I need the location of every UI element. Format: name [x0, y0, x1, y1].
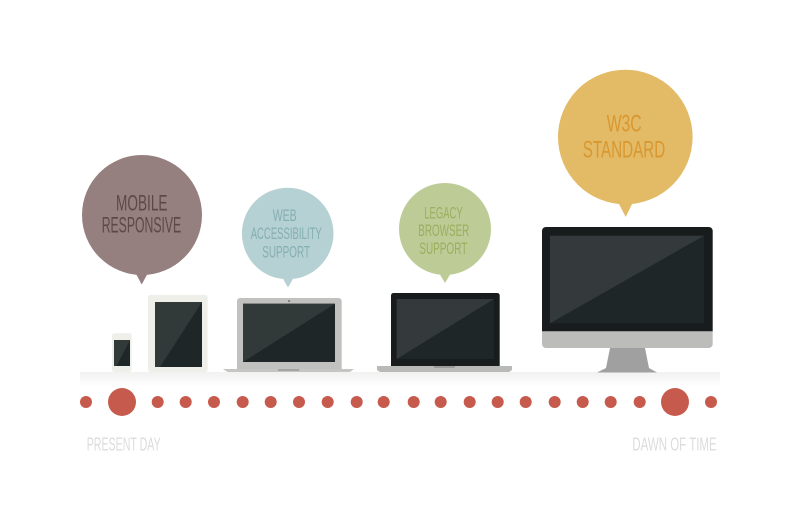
- bubble label: legacy browser support: LEGACY: [424, 204, 463, 222]
- device: desktop monitor: [542, 227, 713, 372]
- marker: present day: [108, 388, 136, 416]
- bubble label: web accessibility support: ACCESSIBILITY: [251, 225, 322, 243]
- bubble label: legacy browser support: SUPPORT: [419, 240, 467, 258]
- timeline label: dawn of time: DAWN OF TIME: [632, 435, 717, 455]
- bubble label: W3C standard: [583, 111, 665, 163]
- bubble label: mobile responsive: MOBILE: [116, 191, 168, 216]
- bubble label: legacy browser support: [418, 204, 469, 258]
- device: dark laptop: [377, 293, 512, 372]
- bubble label: mobile responsive: [102, 191, 181, 237]
- speech bubble: W3C standard: [558, 70, 693, 217]
- speech bubble: legacy browser support: [399, 183, 491, 283]
- device: silver laptop: [223, 298, 354, 372]
- bubble label: web accessibility support: WEB: [273, 207, 297, 225]
- bubble label: mobile responsive: RESPONSIVE: [102, 212, 181, 237]
- bubble label: web accessibility support: [251, 207, 322, 261]
- speech bubble: mobile responsive: [82, 155, 202, 284]
- timeline label: present day: PRESENT DAY: [87, 435, 161, 455]
- device: tablet: [148, 295, 208, 372]
- speech bubble: web accessibility support: [242, 188, 334, 288]
- shelf: [80, 372, 720, 387]
- bubble label: W3C standard: W3C: [607, 111, 642, 138]
- bubble label: web accessibility support: SUPPORT: [262, 243, 310, 261]
- bubble label: legacy browser support: BROWSER: [418, 222, 469, 240]
- marker: dawn of time: [661, 388, 689, 416]
- bubble label: W3C standard: STANDARD: [583, 136, 665, 163]
- timeline dots: [80, 388, 717, 416]
- device: smartphone: [112, 333, 132, 372]
